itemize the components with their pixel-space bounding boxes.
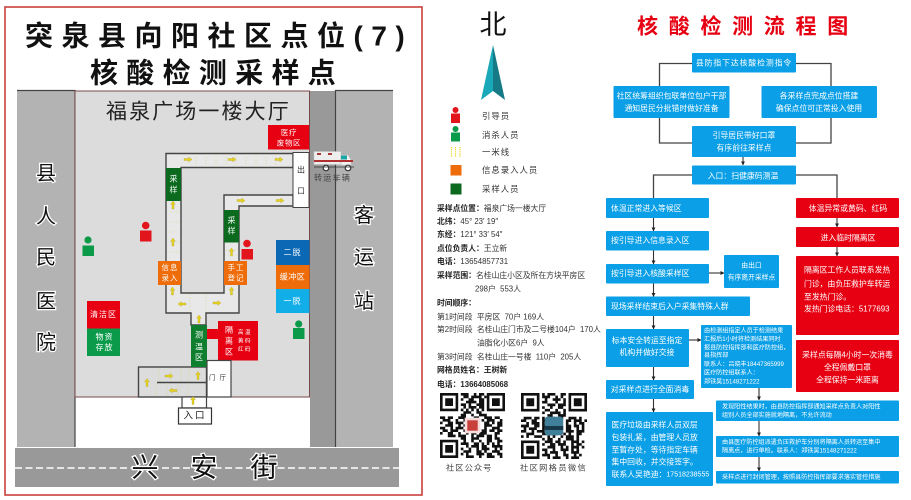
step: medical waste — [606, 412, 713, 486]
step: leave through exit: 由出口 — [741, 260, 762, 270]
site information text: 第2时间段 名桂山庄门市及二号楼104户 170人 — [437, 324, 601, 334]
isolation area: 红码 — [238, 345, 252, 353]
building: county hospital: 民 — [36, 247, 56, 269]
manual registration station: 登记 — [228, 272, 244, 282]
site information text: 油脂化小区6户 9人 — [477, 338, 545, 348]
step: guide residents: 引导居民带好口罩 — [713, 130, 776, 140]
note: result reporting — [701, 325, 792, 388]
step: normal temperature: 体温正常进入等候区 — [611, 203, 682, 213]
title — [25, 20, 413, 88]
building: bus station: 运 — [354, 247, 374, 269]
title: 核酸检测采样点 — [90, 58, 344, 88]
step: leave through exit — [724, 255, 779, 288]
QR code: grid worker WeChat — [521, 394, 587, 458]
road: Xing'an Street: 安 — [190, 453, 218, 483]
site information text: 第1时间段 平房区 70户 169人 — [437, 312, 544, 322]
isolation area — [207, 321, 258, 360]
step: sampling — [606, 264, 709, 284]
building: county hospital: 县 — [36, 163, 56, 185]
supplies storage: 物资 — [96, 332, 114, 342]
exit: 出 — [297, 164, 305, 174]
medical waste area: 废物区 — [277, 138, 301, 148]
icon: ambulance — [314, 152, 354, 182]
step: isolation staff contact — [796, 256, 899, 335]
step: sites prepared: 确保点位可正常投入使用 — [776, 103, 862, 113]
site information text: 第3时间段 名桂山庄一号楼 110户 205人 — [437, 352, 581, 362]
note: result reporting: 郑铁昊15148271222 — [704, 378, 760, 386]
temperature check: 测 — [195, 330, 203, 340]
step: county order — [692, 53, 796, 72]
legend — [450, 107, 538, 194]
note: result reporting: 汇报后1小时将检测结果同时 — [704, 335, 781, 343]
step: specimen transfer — [606, 329, 689, 367]
second undress zone — [276, 240, 310, 265]
step: medical waste: 至暂存处，等待指定车辆 — [612, 444, 698, 454]
step: specimen transfer: 标本安全转运至指定 — [612, 335, 682, 345]
step: guide residents: 有序前往采样点 — [717, 142, 772, 152]
note: result reporting: 联系人：吕晓丰18447365999 — [704, 360, 785, 368]
door hall — [207, 360, 231, 397]
step: entrance scan — [692, 166, 796, 184]
step: positive result: 发现阳性结果时，由县防控指挥部通知采样点负责人对阳性 — [722, 402, 880, 410]
north arrow — [480, 10, 506, 100]
callout: site safety: 全程保持一米距离 — [816, 374, 879, 384]
step: information entry: 按引导进入信息录入区 — [611, 235, 690, 245]
step: guide residents — [692, 126, 796, 157]
step: leave through exit: 有序离开采样点 — [728, 272, 775, 282]
step: isolation staff contact: 发热门诊电话：5177693 — [804, 304, 890, 314]
site information text: 时间顺序： — [437, 298, 476, 308]
manual registration station: 手工 — [228, 262, 244, 272]
step: information entry — [606, 231, 709, 250]
temperature check — [191, 325, 207, 367]
information entry station — [158, 261, 181, 285]
connectors — [654, 64, 837, 471]
legend: one metre line: 一米线 — [482, 147, 510, 157]
isolation area: 区 — [225, 348, 233, 356]
step: sites prepared — [762, 86, 877, 118]
door hall: 门厅 — [209, 372, 230, 382]
step: entrance scan: 入口：扫健康码测温 — [708, 170, 778, 180]
step: sites prepared: 各采样点完成点位搭建 — [780, 90, 858, 100]
panel: nucleic acid test flowchart — [606, 14, 899, 486]
title: 突泉县向阳社区点位(7) — [25, 20, 413, 52]
step: site disinfection — [606, 380, 694, 399]
step: positive result — [716, 400, 899, 421]
step: medical waste: 包装扎紧，由管理人员放 — [612, 432, 698, 442]
step: transfer to isolation: 由县医疗防控组派遣负压救护车分别将隔离人员转运至集中 — [722, 438, 880, 446]
callout: site safety — [796, 340, 899, 392]
step: transfer to isolation: 隔离点，进行单检。联系人：郑铁昊15148271222 — [722, 446, 857, 454]
step: sampling: 按引导进入核酸采样区 — [611, 268, 690, 278]
step: community notifies residents: 社区统筹组织包联单位包户干部 — [617, 90, 727, 100]
note: result reporting: 医疗防控组联系人： — [704, 368, 759, 376]
sampling station 1 — [166, 168, 181, 201]
step: transfer to isolation — [716, 436, 899, 457]
step: special groups: 现场采样结束后入户采集特殊人群 — [611, 301, 729, 311]
QR code: community account — [440, 394, 504, 457]
note: result reporting: 报县防控指挥部和医疗防控组， — [704, 344, 789, 352]
buffer zone — [276, 265, 310, 289]
step: medical waste: 联系人吴艳迪：17518238555 — [612, 469, 709, 479]
entry passage — [182, 396, 206, 408]
sampling station 1: 样 — [170, 184, 178, 194]
callout: site safety: 采样点每隔4小时一次消毒 — [802, 350, 893, 360]
north arrow: 北 — [480, 10, 506, 40]
building: bus station: 站 — [354, 290, 374, 313]
site information text: 采样范围：名桂山庄小区及所在方块平房区 — [437, 270, 585, 280]
panel: site map — [5, 7, 422, 495]
step: isolation staff contact: 隔离区工作人员联系发热 — [804, 264, 890, 274]
entrance — [178, 408, 212, 424]
step: normal temperature — [606, 198, 709, 218]
first undress zone — [276, 289, 310, 313]
exit: 口 — [297, 186, 305, 196]
site information text: 北纬：45° 23′ 19″ — [437, 216, 498, 226]
QR caption: grid worker WeChat: 社区网格员微信 — [520, 462, 587, 472]
information entry station: 录入 — [162, 274, 178, 282]
entrance: 入口 — [183, 410, 207, 422]
legend: disinfector: 消杀人员 — [482, 130, 520, 140]
step: site closure — [716, 471, 899, 484]
legend: information entry staff: 信息录入人员 — [482, 165, 538, 175]
medical waste area: 医疗 — [281, 127, 297, 137]
site information text: 298户 553人 — [475, 284, 521, 294]
exit — [293, 152, 309, 208]
step: temporary isolation — [796, 227, 899, 247]
site information text: 采样点位置：福泉广场一楼大厅 — [437, 202, 546, 212]
sampling station 2 — [224, 210, 239, 242]
ambulance label: 转运车辆 — [314, 172, 351, 182]
clean area — [87, 301, 120, 328]
site information text: 点位负责人：王立新 — [437, 242, 507, 252]
site information text: 东经：121° 33′ 54″ — [437, 228, 503, 238]
step: site disinfection: 对采样点进行全面消毒 — [611, 384, 689, 394]
medical waste area — [268, 125, 309, 150]
step: positive result: 组别人员全部实施就地隔离，不允许流动 — [722, 411, 832, 419]
icon: guide 1 — [140, 222, 152, 242]
sampling station 2: 样 — [228, 226, 236, 236]
isolation area: 离 — [225, 336, 233, 346]
building: bus station: 客 — [354, 204, 374, 227]
temperature check: 温 — [195, 342, 203, 352]
note: result reporting: 县指挥部 — [704, 351, 728, 359]
step: temporary isolation: 进入临时隔离区 — [821, 232, 876, 242]
step: isolation staff contact: 门诊，由负压救护车转运 — [804, 278, 890, 288]
step: special groups — [606, 296, 750, 316]
hall floor — [75, 91, 310, 397]
sampling station 2: 采 — [228, 215, 236, 225]
step: abnormal temperature: 体温异常或黄码、红码 — [809, 203, 887, 213]
note: result reporting: 由检测组指定人员于检测结果 — [704, 326, 783, 334]
icon: guide 2 — [242, 240, 253, 260]
step: specimen transfer: 机构并做好交接 — [620, 347, 675, 357]
sampling station 1: 采 — [170, 174, 178, 184]
building: county hospital: 院 — [36, 331, 56, 354]
supplies storage — [87, 328, 120, 356]
callout: site safety: 全程佩戴口罩 — [824, 362, 871, 372]
isolation area: 高温 — [238, 328, 252, 336]
step: site closure: 采样点进行封闭管理，按照县防控指挥部要求落实管控措施 — [722, 473, 880, 481]
side lane — [310, 91, 336, 447]
building: bus station — [336, 90, 393, 447]
site information text: 网格员姓名：王树新 — [437, 364, 507, 374]
entry queue corridor — [138, 367, 207, 397]
legend: sampling staff: 采样人员 — [482, 184, 520, 194]
legend: guide: 引导员 — [482, 111, 510, 121]
icon: disinfector 2 — [293, 320, 304, 339]
sampling corridor — [166, 154, 293, 325]
flowchart title: 核酸检测流程图 — [637, 14, 859, 38]
road: Xing'an Street: 街 — [250, 453, 278, 483]
road: Xing'an Street: 兴 — [132, 453, 158, 483]
supplies storage: 存放 — [96, 342, 114, 352]
isolation area: 隔 — [225, 326, 233, 334]
buffer zone: 缓冲区 — [280, 272, 305, 282]
step: medical waste: 集中回收，并交接签字。 — [612, 456, 698, 466]
manual registration station — [224, 261, 247, 285]
building: county hospital: 人 — [36, 205, 56, 228]
site information text: 电话：13654857731 — [437, 256, 508, 266]
building: county hospital — [17, 90, 75, 447]
step: medical waste: 医疗垃圾由采样人员双层 — [612, 420, 698, 430]
QR caption: community account: 社区公众号 — [446, 462, 492, 472]
hall name: 福泉广场一楼大厅 — [106, 100, 291, 124]
step: county order: 县防指下达核酸检测指令 — [696, 58, 792, 68]
temperature check: 区 — [195, 353, 203, 362]
clean area: 清洁区 — [90, 309, 117, 319]
second undress zone: 二脱 — [284, 247, 302, 257]
step: community notifies residents: 通知居民分批错时做好准备 — [624, 103, 719, 113]
icon: disinfector 1 — [82, 236, 94, 256]
building: county hospital: 医 — [36, 291, 56, 313]
information entry station: 信息 — [162, 262, 178, 272]
road: Xing'an Street — [15, 448, 422, 487]
site information text — [437, 202, 601, 388]
step: abnormal temperature — [796, 198, 899, 218]
step: isolation staff contact: 至发热门诊。 — [804, 292, 851, 302]
step: community notifies residents — [614, 86, 730, 118]
isolation area: 黄码 — [238, 336, 252, 344]
first undress zone: 一脱 — [284, 296, 302, 306]
site information text: 电话：13664085068 — [437, 378, 509, 388]
